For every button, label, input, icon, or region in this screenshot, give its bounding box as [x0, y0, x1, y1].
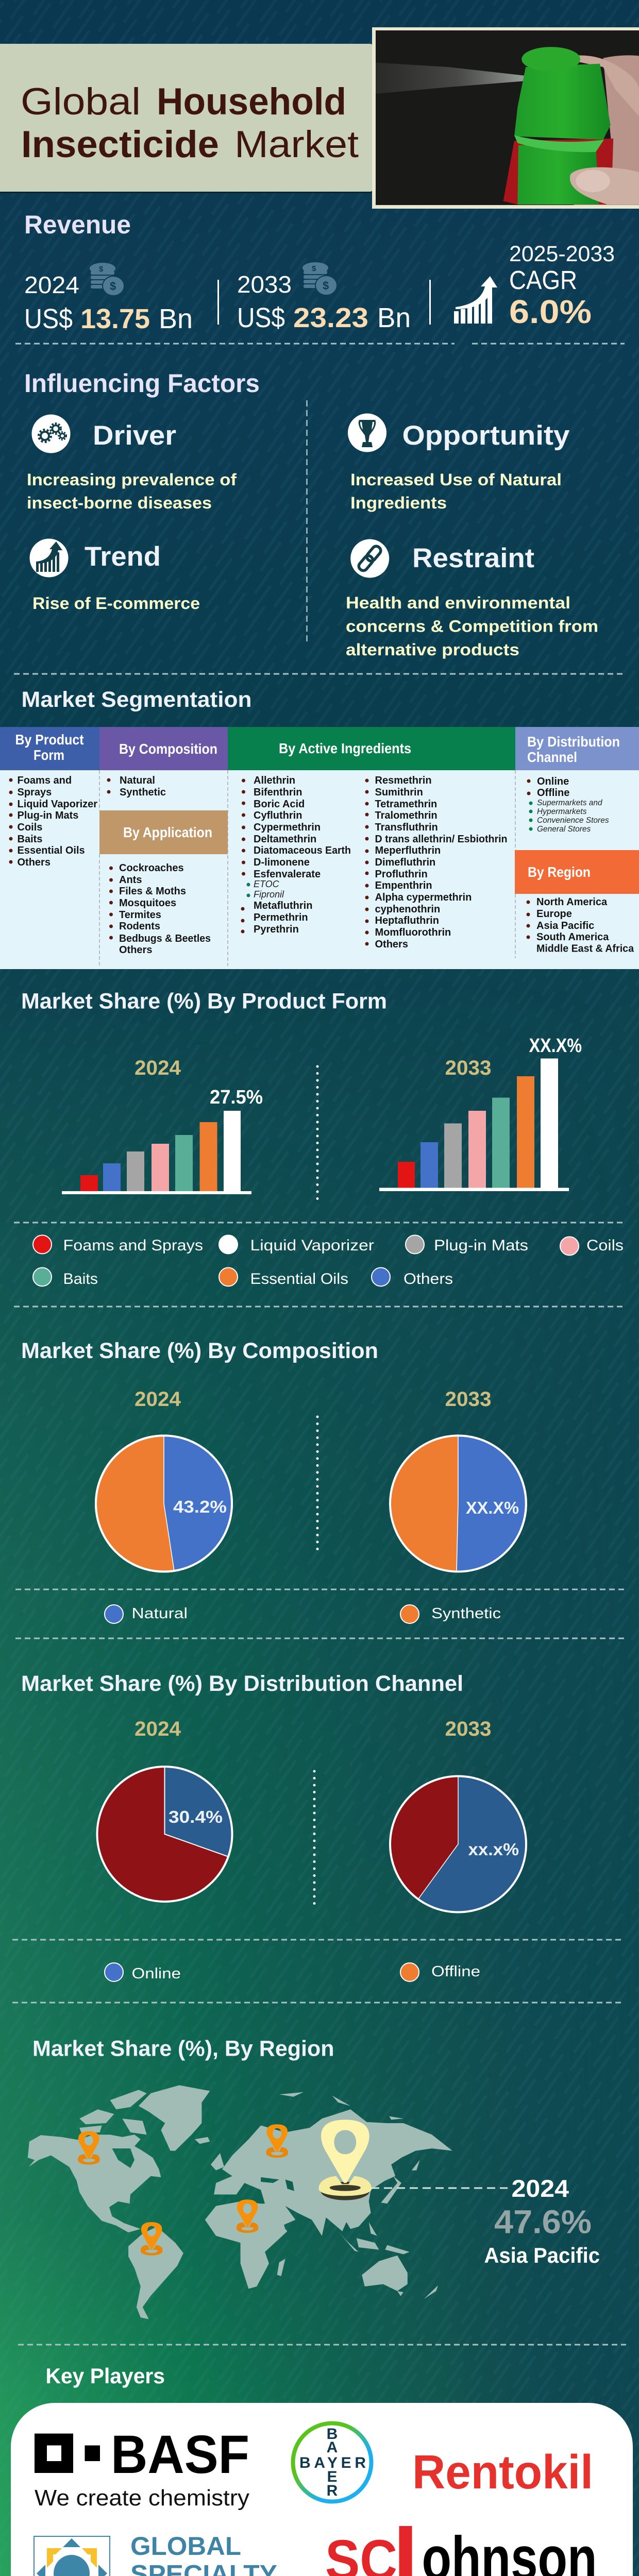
bar chart 2024: 27.5%	[210, 1087, 263, 1108]
panel: market share by product form	[14, 989, 624, 1287]
column: by product form: Plug-in Mats	[18, 810, 78, 821]
heading: key players: Key Players	[45, 2364, 165, 2388]
column: by product form: By Product	[15, 732, 83, 748]
column: by product form: Essential Oils	[18, 845, 85, 856]
column: by active ingredients: Tetramethrin	[375, 799, 437, 810]
column: by region: North America	[536, 896, 608, 908]
callout: asia pacific share: 47.6%	[494, 2203, 592, 2240]
column: by active ingredients: Fipronil	[254, 889, 284, 900]
column: by active ingredients: Cyfluthrin	[254, 810, 302, 821]
column: by distribution channel: General Stores	[537, 825, 591, 834]
column: by active ingredients: Diatomaceous Earth	[254, 845, 351, 856]
restraint: concerns & Competition from	[346, 617, 598, 636]
opportunity: Ingredients	[350, 494, 447, 512]
column: by distribution channel: Supermarkets and	[537, 799, 603, 807]
header title panel: Insecticide	[21, 124, 219, 165]
column: by application: Mosquitoes	[119, 897, 176, 909]
panel: market share by distribution channel: 2033	[445, 1718, 492, 1740]
column: by region: By Region	[528, 864, 591, 880]
column: by application: Termites	[119, 909, 161, 921]
column: by active ingredients: D-limonene	[254, 857, 310, 868]
bar chart 2033	[379, 1035, 582, 1191]
heading: influencing factors: Influencing Factors	[24, 369, 260, 398]
column: by application	[99, 810, 228, 956]
logo: Rentokil: Rentokil	[412, 2445, 593, 2499]
callout: asia pacific share: 2024	[511, 2175, 569, 2202]
legend: product form	[33, 1235, 624, 1287]
icon: chain link	[357, 545, 382, 572]
column: by distribution channel: Hypermarkets	[537, 807, 587, 816]
column: by active ingredients: Alpha cypermethrin	[375, 892, 472, 903]
column: by active ingredients: Resmethrin	[375, 775, 432, 786]
column: by composition: Synthetic	[120, 787, 166, 798]
legend: product form: Plug-in Mats	[434, 1237, 528, 1254]
column: by product form: Baits	[18, 834, 42, 845]
bar chart 2033: XX.X%	[529, 1035, 582, 1057]
callout: asia pacific share: Asia Pacific	[484, 2243, 600, 2267]
column: by composition: Natural	[120, 775, 155, 786]
logo: BASF: BASF	[111, 2425, 249, 2485]
logo: BASF	[35, 2425, 249, 2511]
revenue 2033: $	[312, 264, 316, 273]
panel: market share by composition: 2024	[134, 1388, 181, 1411]
column: by region: Europe	[536, 908, 572, 920]
column: by distribution channel: Offline	[537, 787, 569, 799]
logo: Global Specialty Solutions	[34, 2532, 283, 2576]
revenue 2033: 2033	[237, 271, 292, 298]
icon: pin south america	[141, 2222, 163, 2256]
bar chart 2024	[62, 1057, 263, 1194]
column: by active ingredients: cyphenothrin	[375, 904, 440, 915]
CAGR block: CAGR	[509, 265, 577, 295]
header title panel: Market	[234, 124, 359, 165]
column: by distribution channel	[515, 727, 639, 834]
logo: Bayer	[293, 2424, 371, 2502]
column: by product form: Others	[18, 857, 51, 868]
bar chart 2024: 2024	[134, 1057, 181, 1079]
trend: Trend	[85, 541, 161, 572]
restraint: alternative products	[346, 640, 519, 659]
revenue 2024: Bn	[159, 303, 193, 334]
column: by active ingredients: Boric Acid	[254, 799, 305, 810]
revenue 2033: US$	[237, 302, 285, 333]
CAGR block	[509, 242, 615, 330]
legend: product form: Others	[403, 1270, 453, 1287]
pie chart 2024	[96, 1435, 232, 1571]
column: by distribution channel: Convenience Stores	[537, 816, 609, 825]
column: by active ingredients: By Active Ingredients	[279, 740, 411, 756]
legend: product form: Essential Oils	[250, 1270, 348, 1287]
pie chart 2033: XX.X%	[466, 1498, 519, 1517]
driver: Driver	[93, 420, 176, 451]
CAGR block: 2025-2033	[509, 242, 615, 266]
legend: distribution channel	[105, 1963, 480, 1982]
logo: SC Johnson	[325, 2524, 597, 2576]
logo: Global Specialty Solutions: GLOBAL	[130, 2532, 241, 2561]
column: by active ingredients: Tralomethrin	[375, 810, 438, 821]
revenue 2033	[237, 262, 411, 333]
CAGR block: 6.0%	[509, 293, 592, 330]
driver: Increasing prevalence of	[27, 470, 237, 489]
logo: BASF: We create chemistry	[35, 2485, 249, 2511]
column: by active ingredients: Metafluthrin	[254, 900, 312, 911]
trend: Rise of E-commerce	[32, 594, 200, 613]
logo: Bayer: BAYER	[299, 2454, 366, 2471]
heading: Market Share (%) By Distribution Channel	[21, 1671, 463, 1696]
column: by region	[515, 850, 639, 954]
pie chart 2033	[390, 1776, 526, 1912]
revenue 2033: 23.23	[293, 302, 368, 333]
column: by active ingredients: ETOC	[254, 879, 280, 889]
column: by active ingredients: Dimefluthrin	[375, 857, 435, 868]
pie chart 2033: xx.x%	[468, 1840, 519, 1859]
icon: pin middle east africa	[237, 2199, 258, 2233]
header photo: green insecticide spray can	[372, 27, 639, 210]
column: by region: Asia Pacific	[536, 920, 594, 931]
column: by application: By Application	[123, 824, 212, 840]
column: by product form: Coils	[18, 822, 42, 833]
column: by active ingredients: Sumithrin	[375, 787, 423, 798]
world map with pins	[28, 2085, 452, 2319]
column: by application: Others	[119, 944, 152, 956]
column: by active ingredients: Empenthrin	[375, 880, 432, 891]
icon: growth chart arrow	[454, 276, 497, 324]
column: by active ingredients: D trans allethrin/ Esbiothrin	[375, 834, 507, 845]
opportunity	[348, 413, 570, 512]
column: by product form: Foams and	[18, 775, 72, 786]
logo: Bayer: A	[327, 2439, 338, 2456]
legend: distribution channel: Online	[132, 1965, 181, 1982]
legend: composition: Synthetic	[431, 1605, 501, 1622]
trend	[30, 539, 200, 613]
driver: insect-borne diseases	[27, 494, 212, 512]
revenue 2024: 2024	[24, 272, 79, 298]
icon: trophy	[358, 420, 377, 447]
panel: market share by composition: 2033	[445, 1388, 492, 1411]
column: by composition	[99, 727, 228, 798]
revenue 2024: $	[99, 265, 104, 274]
column: by distribution channel: Channel	[527, 749, 577, 765]
column: by application: Bedbugs & Beetles	[119, 933, 211, 944]
column: by active ingredients: Meperfluthrin	[375, 845, 441, 856]
column: by active ingredients: Allethrin	[254, 775, 295, 786]
pie chart 2033	[390, 1435, 526, 1572]
column: by active ingredients: Bifenthrin	[254, 787, 302, 798]
column: by composition: By Composition	[119, 741, 217, 757]
column: by active ingredients: Esfenvalerate	[254, 869, 321, 880]
column: by region: South America	[536, 931, 609, 943]
column: by application: Ants	[119, 874, 142, 886]
heading: Market Share (%) By Composition	[21, 1338, 378, 1363]
column: by active ingredients: Transfluthrin	[375, 822, 438, 833]
opportunity: Opportunity	[402, 420, 570, 451]
revenue 2033: $	[323, 279, 329, 292]
panel: key players logos	[11, 2403, 633, 2576]
column: by product form: Sprays	[18, 787, 52, 798]
revenue 2024: $	[110, 280, 116, 293]
column: by active ingredients: Permethrin	[254, 912, 308, 923]
panel: segmentation table	[0, 727, 639, 969]
restraint	[346, 539, 598, 659]
logo: Bayer: R	[327, 2482, 338, 2499]
panel: market share by distribution channel: 2024	[134, 1718, 181, 1740]
column: by application: Cockroaches	[119, 862, 184, 874]
header title panel: Household	[157, 81, 346, 123]
column: by product form	[0, 727, 99, 868]
revenue 2024: 13.75	[80, 303, 150, 334]
column: by active ingredients: Momfluorothrin	[375, 927, 451, 938]
column: by active ingredients: Profluthrin	[375, 869, 428, 880]
revenue 2024	[24, 263, 193, 334]
panel: influencing factors	[24, 369, 598, 659]
legend: product form: Foams and Sprays	[63, 1237, 203, 1254]
panel: revenue	[24, 210, 615, 334]
logo: Bayer: E	[327, 2468, 338, 2485]
header title panel: Global	[21, 81, 141, 123]
legend: distribution channel: Offline	[431, 1963, 480, 1980]
panel: market share by distribution channel	[12, 1671, 621, 1982]
column: by application: Files & Moths	[119, 886, 186, 897]
pie chart 2024	[97, 1767, 232, 1902]
panel: market share by composition	[15, 1338, 625, 1623]
icon: pin north america	[78, 2131, 100, 2165]
legend: product form: Baits	[63, 1270, 98, 1287]
restraint: Restraint	[412, 543, 534, 573]
heading: market segmentation: Market Segmentation	[22, 687, 252, 712]
column: by active ingredients: Others	[375, 939, 408, 950]
column: by active ingredients: Heptafluthrin	[375, 915, 439, 926]
heading: revenue: Revenue	[24, 210, 131, 239]
revenue 2033: Bn	[377, 302, 411, 333]
column: by active ingredients: Pyrethrin	[254, 924, 299, 935]
restraint: Health and environmental	[346, 594, 570, 612]
revenue 2024: US$	[24, 303, 73, 334]
column: by product form: Liquid Vaporizer	[18, 799, 97, 810]
column: by region: Middle East & Africa	[536, 943, 634, 954]
logo: Bayer: B	[327, 2426, 338, 2443]
column: by product form: Form	[33, 747, 64, 763]
panel: market share by region	[28, 2036, 600, 2319]
icon: pin europe	[266, 2124, 288, 2158]
heading: Market Share (%), By Region	[32, 2036, 334, 2061]
column: by distribution channel: Online	[537, 776, 569, 787]
driver	[27, 414, 237, 512]
pie chart 2024: 43.2%	[173, 1497, 227, 1516]
column: by active ingredients: Cypermethrin	[254, 822, 321, 833]
legend: product form: Coils	[586, 1237, 624, 1254]
icon: large pin asia pacific	[318, 2120, 372, 2200]
header title panel	[0, 44, 373, 193]
legend: composition: Natural	[132, 1605, 188, 1622]
column: by application: Rodents	[119, 921, 160, 932]
callout: asia pacific share	[484, 2175, 600, 2267]
icon: trend arrow	[36, 541, 62, 572]
bar chart 2033: 2033	[445, 1057, 492, 1079]
pie chart 2024: 30.4%	[169, 1807, 223, 1826]
column: by distribution channel: By Distribution	[527, 734, 620, 750]
opportunity: Increased Use of Natural	[350, 470, 562, 489]
heading: Market Share (%) By Product Form	[21, 989, 387, 1014]
legend: product form: Liquid Vaporizer	[250, 1237, 374, 1254]
column: by active ingredients: Deltamethrin	[254, 834, 316, 845]
legend: composition	[105, 1605, 501, 1623]
column: by active ingredients	[228, 727, 515, 950]
